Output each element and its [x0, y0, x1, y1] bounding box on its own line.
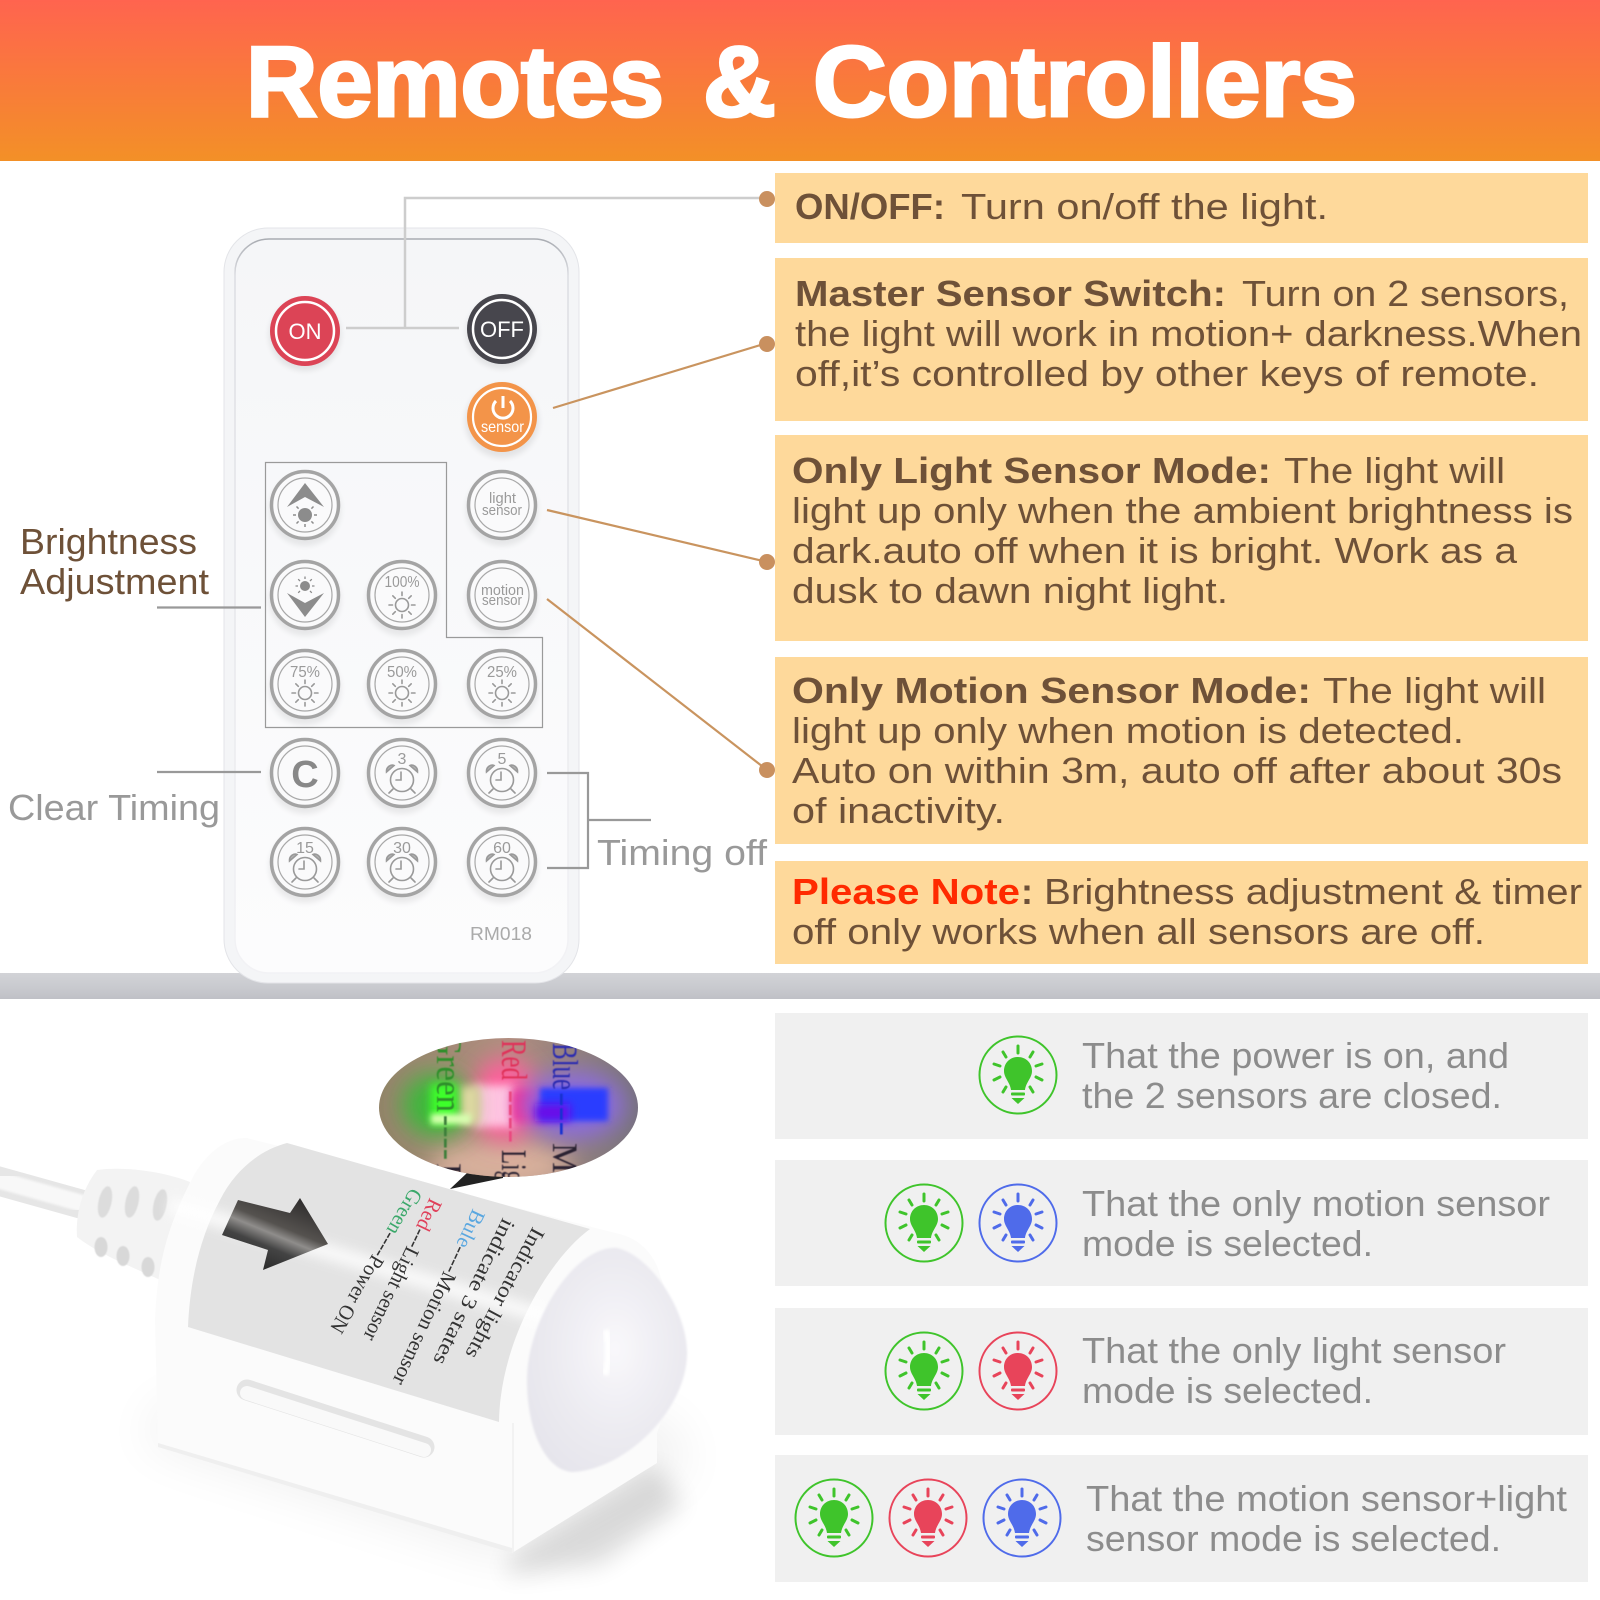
label highlight [170, 1205, 550, 1318]
light sensor button: light [489, 490, 517, 507]
5 minute timer button: 5 [498, 751, 507, 768]
panel: light sensor state: That the only light sensor [1082, 1330, 1506, 1371]
30 minute timer button [366, 828, 438, 903]
panel: master sensor switch: off,it’s controlled by other keys of remote. [795, 353, 1539, 394]
callout: indicator lights magnified: Lig [494, 1150, 534, 1182]
bottom front edge [158, 1443, 512, 1553]
connector: timing off bracket [547, 773, 651, 868]
strain relief [77, 1169, 190, 1280]
callout: indicator lights magnified: ---- [494, 1090, 534, 1143]
device shadow [140, 1400, 690, 1575]
ON button: ON [288, 319, 322, 344]
label: brightness adjustment: Brightness [20, 521, 197, 562]
light sensor button: sensor [482, 502, 522, 519]
connector: brightness adjustment [157, 606, 261, 609]
OFF button [466, 294, 538, 369]
icon: green bulb [886, 1184, 962, 1262]
panel: on/off [775, 173, 1588, 243]
15 minute timer button: 15 [296, 840, 314, 857]
25% button [466, 650, 538, 725]
50% button [366, 650, 438, 725]
panel: only motion sensor mode: of inactivity. [792, 790, 1005, 831]
panel: power on state [775, 1013, 1588, 1139]
panel: motion and light state: That the motion sensor+light [1086, 1478, 1567, 1519]
callout: indicator lights magnified: P [429, 1163, 469, 1185]
panel: master sensor switch: Turn on 2 sensors, [1242, 273, 1569, 314]
label text: indicate 3 states [428, 1215, 520, 1369]
header banner [0, 0, 1600, 161]
panel: motion sensor state: mode is selected. [1082, 1223, 1373, 1264]
icon: blue bulb [984, 1480, 1060, 1556]
label text: Red---Light sensor [359, 1195, 447, 1345]
75% button: 75% [290, 664, 320, 681]
panel: only light sensor mode: Only Light Sensor Mode: [792, 450, 1271, 491]
OFF button: OFF [480, 317, 524, 342]
label sticker [188, 1143, 590, 1422]
motion sensor button: sensor [482, 592, 522, 609]
ON button [269, 296, 341, 371]
panel: only light sensor mode: The light will [1284, 450, 1505, 491]
divider band [0, 973, 1600, 999]
brightness down button [269, 562, 341, 636]
panel: only motion sensor mode [775, 657, 1588, 844]
label text: Indicator lights [461, 1224, 550, 1363]
device body [155, 1138, 687, 1553]
panel: motion sensor state [775, 1160, 1588, 1286]
sensor button [465, 382, 539, 458]
panel: power on state: the 2 sensors are closed. [1082, 1075, 1502, 1116]
panel: please note [775, 861, 1588, 964]
callout: indicator lights magnified [379, 1032, 639, 1190]
panel: light sensor state [775, 1308, 1588, 1435]
panel: please note: : [1021, 871, 1033, 912]
panel: only light sensor mode: dark.auto off when it is bright. Work as a [792, 530, 1518, 571]
callout: indicator lights magnified: Green [429, 1032, 469, 1112]
connector: clear timing [157, 771, 261, 773]
cable [0, 1179, 95, 1208]
title: Remotes [246, 26, 664, 138]
panel: motion and light state: sensor mode is selected. [1086, 1518, 1501, 1559]
panel: only light sensor mode [775, 435, 1588, 641]
25% button: 25% [487, 664, 517, 681]
title: & [703, 26, 776, 138]
panel: master sensor switch: Master Sensor Switch: [795, 273, 1226, 314]
light sensor button [466, 472, 538, 546]
model number: RM018 [470, 924, 532, 944]
icon: red bulb [980, 1332, 1056, 1410]
arrow printed on label [222, 1198, 328, 1270]
callout pointer [450, 1173, 503, 1189]
label: brightness adjustment [20, 521, 209, 602]
15 minute timer button [269, 828, 341, 903]
panel: master sensor switch: the light will work in motion+ darkness.When [795, 313, 1582, 354]
icon: green bulb [886, 1332, 962, 1410]
connector: on/off [346, 191, 775, 328]
remote control [224, 228, 579, 983]
label: clear timing: Clear Timing [8, 787, 220, 828]
panel: only motion sensor mode: Only Motion Sensor Mode: [792, 670, 1311, 711]
sensor button: sensor [481, 419, 525, 436]
callout: indicator lights magnified: Blue [545, 1043, 585, 1090]
60 minute timer button: 60 [493, 840, 511, 857]
panel: please note: Brightness adjustment & timer [1044, 871, 1582, 912]
panel: light sensor state: mode is selected. [1082, 1370, 1373, 1411]
50% button: 50% [387, 664, 417, 681]
3 minute timer button [366, 740, 438, 814]
connector: light sensor [547, 510, 775, 570]
panel: only motion sensor mode: light up only when motion is detected. [792, 710, 1464, 751]
panel: only light sensor mode: light up only when the ambient brightness is [792, 490, 1573, 531]
panel: only motion sensor mode: The light will [1323, 670, 1546, 711]
panel: power on state: That the power is on, and [1082, 1035, 1509, 1076]
label: timing off: Timing off [597, 832, 768, 873]
panel: master sensor switch [775, 258, 1588, 421]
motion sensor button: motion [481, 582, 524, 599]
title: Controllers [813, 26, 1357, 138]
brightness up button [269, 472, 341, 546]
panel: please note: off only works when all sensors are off. [792, 911, 1485, 952]
icon: blue bulb [980, 1184, 1056, 1262]
icon: green bulb [980, 1036, 1056, 1114]
callout: indicator lights magnified: ---- [429, 1115, 469, 1160]
60 minute timer button [466, 828, 538, 903]
label text: Bule----Motion sensor [388, 1206, 490, 1389]
panel: on/off: ON/OFF: [795, 186, 945, 227]
sensor device [0, 1138, 690, 1575]
icon: red bulb [890, 1480, 966, 1556]
panel: only light sensor mode: dusk to dawn night light. [792, 570, 1228, 611]
connector: master sensor switch [553, 336, 775, 408]
vent slot [247, 1390, 424, 1450]
30 minute timer button: 30 [393, 840, 411, 857]
right face edge [512, 1423, 514, 1553]
panel: only motion sensor mode: Auto on within 3m, auto off after about 30s [792, 750, 1562, 791]
75% button [269, 650, 341, 725]
panel: on/off: Turn on/off the light. [961, 186, 1328, 227]
label: brightness adjustment: Adjustment [20, 561, 209, 602]
clear timer button: C [291, 754, 319, 796]
title [246, 26, 1357, 138]
100% button [366, 562, 438, 636]
100% button: 100% [384, 574, 420, 591]
brightness button group outline [266, 462, 542, 728]
panel: motion sensor state: That the only motion sensor [1082, 1183, 1550, 1224]
clear timer button [269, 740, 341, 814]
label text [325, 1184, 550, 1389]
callout: indicator lights magnified: --- [545, 1092, 585, 1136]
panel: please note: Please Note [792, 871, 1020, 912]
connector: motion sensor [547, 599, 775, 778]
callout: indicator lights magnified: Mo [545, 1143, 585, 1190]
icon: green bulb [796, 1480, 872, 1556]
callout: indicator lights magnified: Red [494, 1040, 534, 1080]
label text: Green----Power ON [325, 1184, 427, 1338]
motion sensor button [466, 562, 538, 636]
5 minute timer button [466, 740, 538, 814]
PIR dome lens [527, 1248, 687, 1472]
3 minute timer button: 3 [398, 751, 407, 768]
panel: motion and light state [775, 1455, 1588, 1582]
